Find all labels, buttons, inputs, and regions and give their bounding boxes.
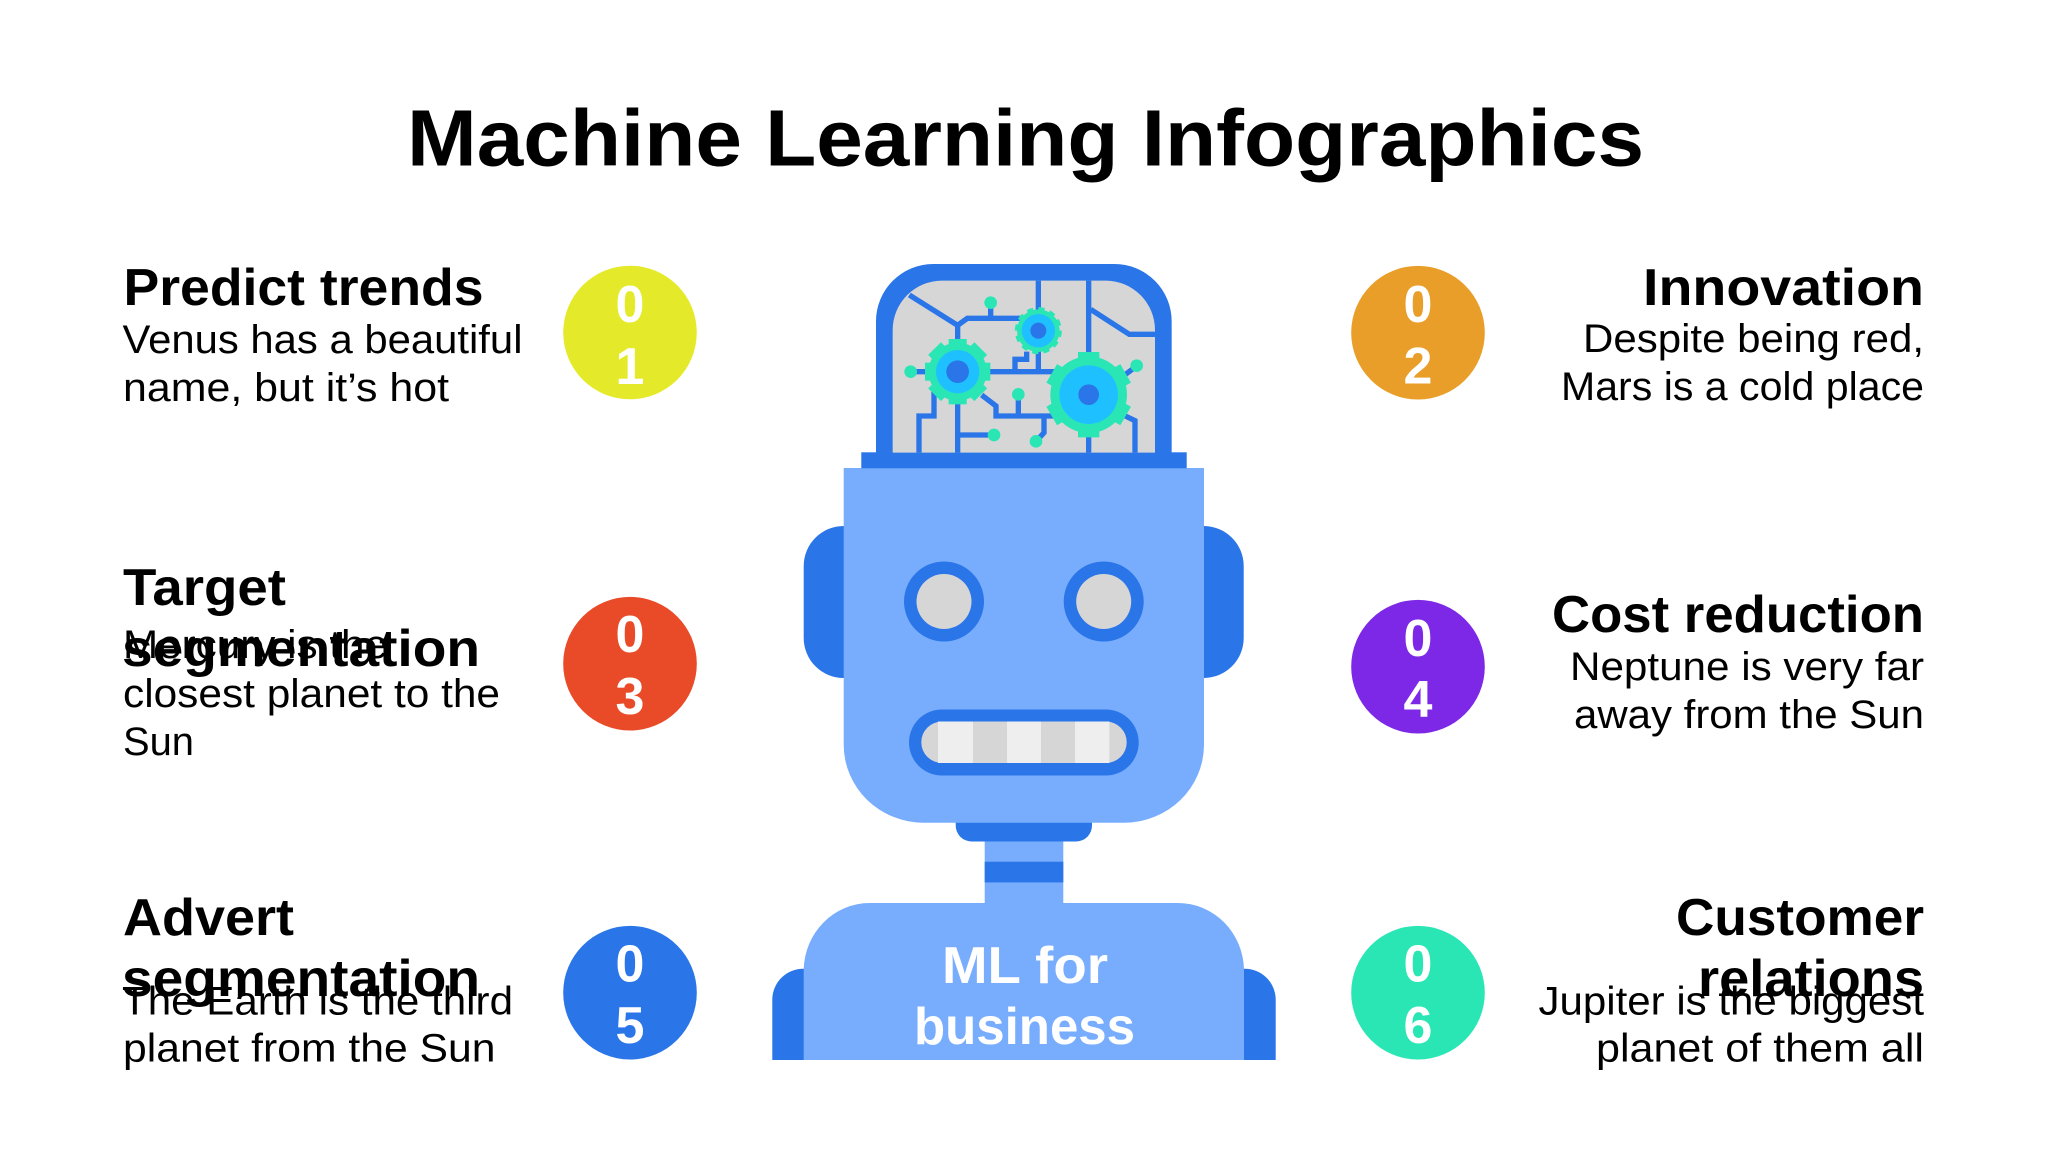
robot head xyxy=(844,468,1204,823)
item 04: cost reduction xyxy=(1351,586,1924,737)
right eye xyxy=(1064,562,1144,642)
number badge: 1 xyxy=(616,338,644,396)
number badge: 3 xyxy=(616,668,644,726)
number badge: 0 xyxy=(1404,276,1432,334)
description: Sun xyxy=(123,720,194,764)
heading: Predict trends xyxy=(124,259,484,317)
dome frame xyxy=(876,264,1172,453)
description: The Earth is the third xyxy=(122,979,513,1023)
description: Mars is a cold place xyxy=(1561,365,1924,409)
number badge: 4 xyxy=(1404,671,1433,729)
heading: Innovation xyxy=(1643,259,1924,317)
description xyxy=(123,623,500,764)
heading xyxy=(1676,889,1924,1008)
description xyxy=(1570,645,1924,737)
circuit traces xyxy=(909,281,1155,453)
number badge: 2 xyxy=(1404,338,1432,396)
number badge: 0 xyxy=(616,276,644,334)
item 01: predict trends xyxy=(122,259,697,410)
description: Despite being red, xyxy=(1583,317,1924,361)
description: planet from the Sun xyxy=(123,1027,496,1071)
number badge: 0 xyxy=(1404,610,1432,668)
number badge: 6 xyxy=(1404,997,1432,1055)
description: closest planet to the xyxy=(123,672,500,716)
number badge xyxy=(1351,266,1485,400)
left eye xyxy=(904,562,984,642)
heading xyxy=(122,559,480,678)
item 02: innovation xyxy=(1351,259,1924,409)
heading: Target xyxy=(123,559,286,617)
item 05: advert segmentation xyxy=(122,889,697,1071)
body label xyxy=(914,937,1135,1056)
item 03: target segmentation xyxy=(122,559,697,764)
head base bar xyxy=(861,452,1187,468)
heading: relations xyxy=(1698,950,1924,1008)
item 06: customer relations xyxy=(1351,889,1924,1071)
number badge: 0 xyxy=(1404,936,1432,994)
number badge xyxy=(563,926,697,1060)
heading: Customer xyxy=(1676,889,1924,947)
heading: segmentation xyxy=(122,950,480,1008)
heading: Advert xyxy=(123,889,294,947)
description: Jupiter is the biggest xyxy=(1538,979,1924,1023)
description: planet of them all xyxy=(1596,1027,1924,1071)
number badge xyxy=(1351,600,1485,734)
robot shoulders xyxy=(772,969,1276,1060)
heading: Cost reduction xyxy=(1552,586,1924,644)
description xyxy=(122,979,513,1071)
heading: segmentation xyxy=(122,620,480,678)
robot body xyxy=(804,903,1244,1060)
description xyxy=(1538,979,1924,1071)
large gear xyxy=(1046,352,1131,437)
number badge: 0 xyxy=(616,936,644,994)
robot neck xyxy=(985,838,1063,908)
description: away from the Sun xyxy=(1574,693,1924,737)
heading xyxy=(122,889,480,1008)
robot collar xyxy=(956,818,1092,842)
description: Venus has a beautiful xyxy=(122,318,522,362)
robot ears xyxy=(804,526,1244,678)
title: Machine Learning Infographics xyxy=(407,94,1644,182)
mouth with teeth xyxy=(909,710,1139,776)
number badge xyxy=(1351,926,1485,1060)
circuit nodes xyxy=(904,296,1143,448)
body label: ML for xyxy=(942,937,1108,995)
number badge xyxy=(563,266,697,399)
number badge xyxy=(563,597,697,730)
description: name, but it’s hot xyxy=(123,366,449,410)
left gear xyxy=(925,339,990,404)
description xyxy=(122,318,522,410)
small gear xyxy=(1016,309,1060,353)
description xyxy=(1561,317,1924,409)
body label: business xyxy=(914,998,1135,1056)
dome interior xyxy=(893,281,1155,453)
number badge: 5 xyxy=(616,997,644,1055)
description: Mercury is the xyxy=(123,623,388,667)
number badge: 0 xyxy=(616,606,644,664)
robot illustration xyxy=(772,264,1276,1060)
description: Neptune is very far xyxy=(1570,645,1924,689)
brain dome with circuit xyxy=(876,264,1172,453)
